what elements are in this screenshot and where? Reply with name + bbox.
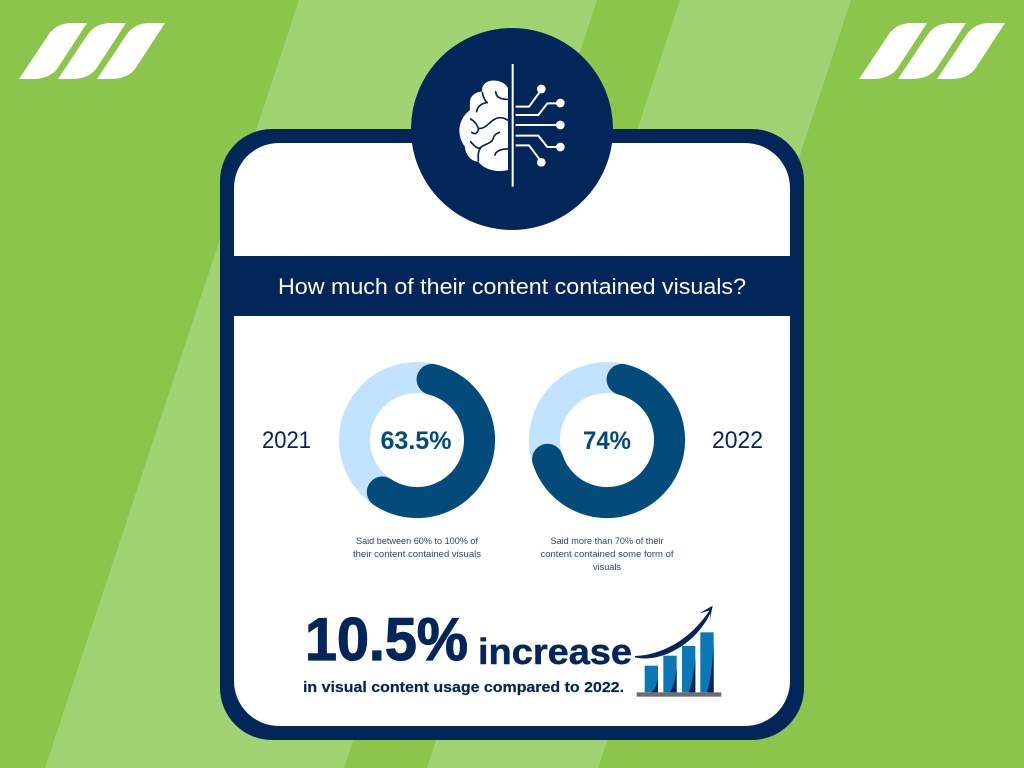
icon badge: brain and circuits	[411, 28, 613, 230]
caption: 2021	[353, 536, 481, 560]
value: 74%: 74%	[583, 427, 631, 455]
callout: 10.5% increase: in visual content usage compared to 2022.	[303, 680, 624, 696]
panel: main card	[220, 129, 804, 740]
callout: 10.5% increase: 10.5%	[305, 606, 468, 673]
logo: left	[19, 23, 165, 79]
logo: right	[859, 23, 1005, 79]
caption: 2022: Said more than 70% of their	[550, 536, 664, 547]
value: 63.5%: 63.5%	[380, 427, 452, 455]
heading band	[234, 256, 790, 316]
caption: 2022: content contained some form of	[540, 549, 674, 560]
donut chart: 2022	[544, 378, 670, 503]
caption: 2021: their content contained visuals	[353, 549, 481, 560]
callout: 10.5% increase: increase	[478, 631, 632, 672]
icon: rising bar chart	[635, 606, 721, 697]
heading: How much of their content contained visuals?	[278, 274, 746, 299]
caption: 2022	[540, 536, 674, 573]
donut chart: 2021	[354, 378, 480, 503]
caption: 2021: Said between 60% to 100% of	[356, 536, 478, 547]
year label: 2021: 2021	[262, 427, 311, 454]
year label: 2022: 2022	[712, 427, 763, 454]
caption: 2022: visuals	[593, 562, 621, 573]
callout: 10.5% increase	[303, 606, 632, 696]
